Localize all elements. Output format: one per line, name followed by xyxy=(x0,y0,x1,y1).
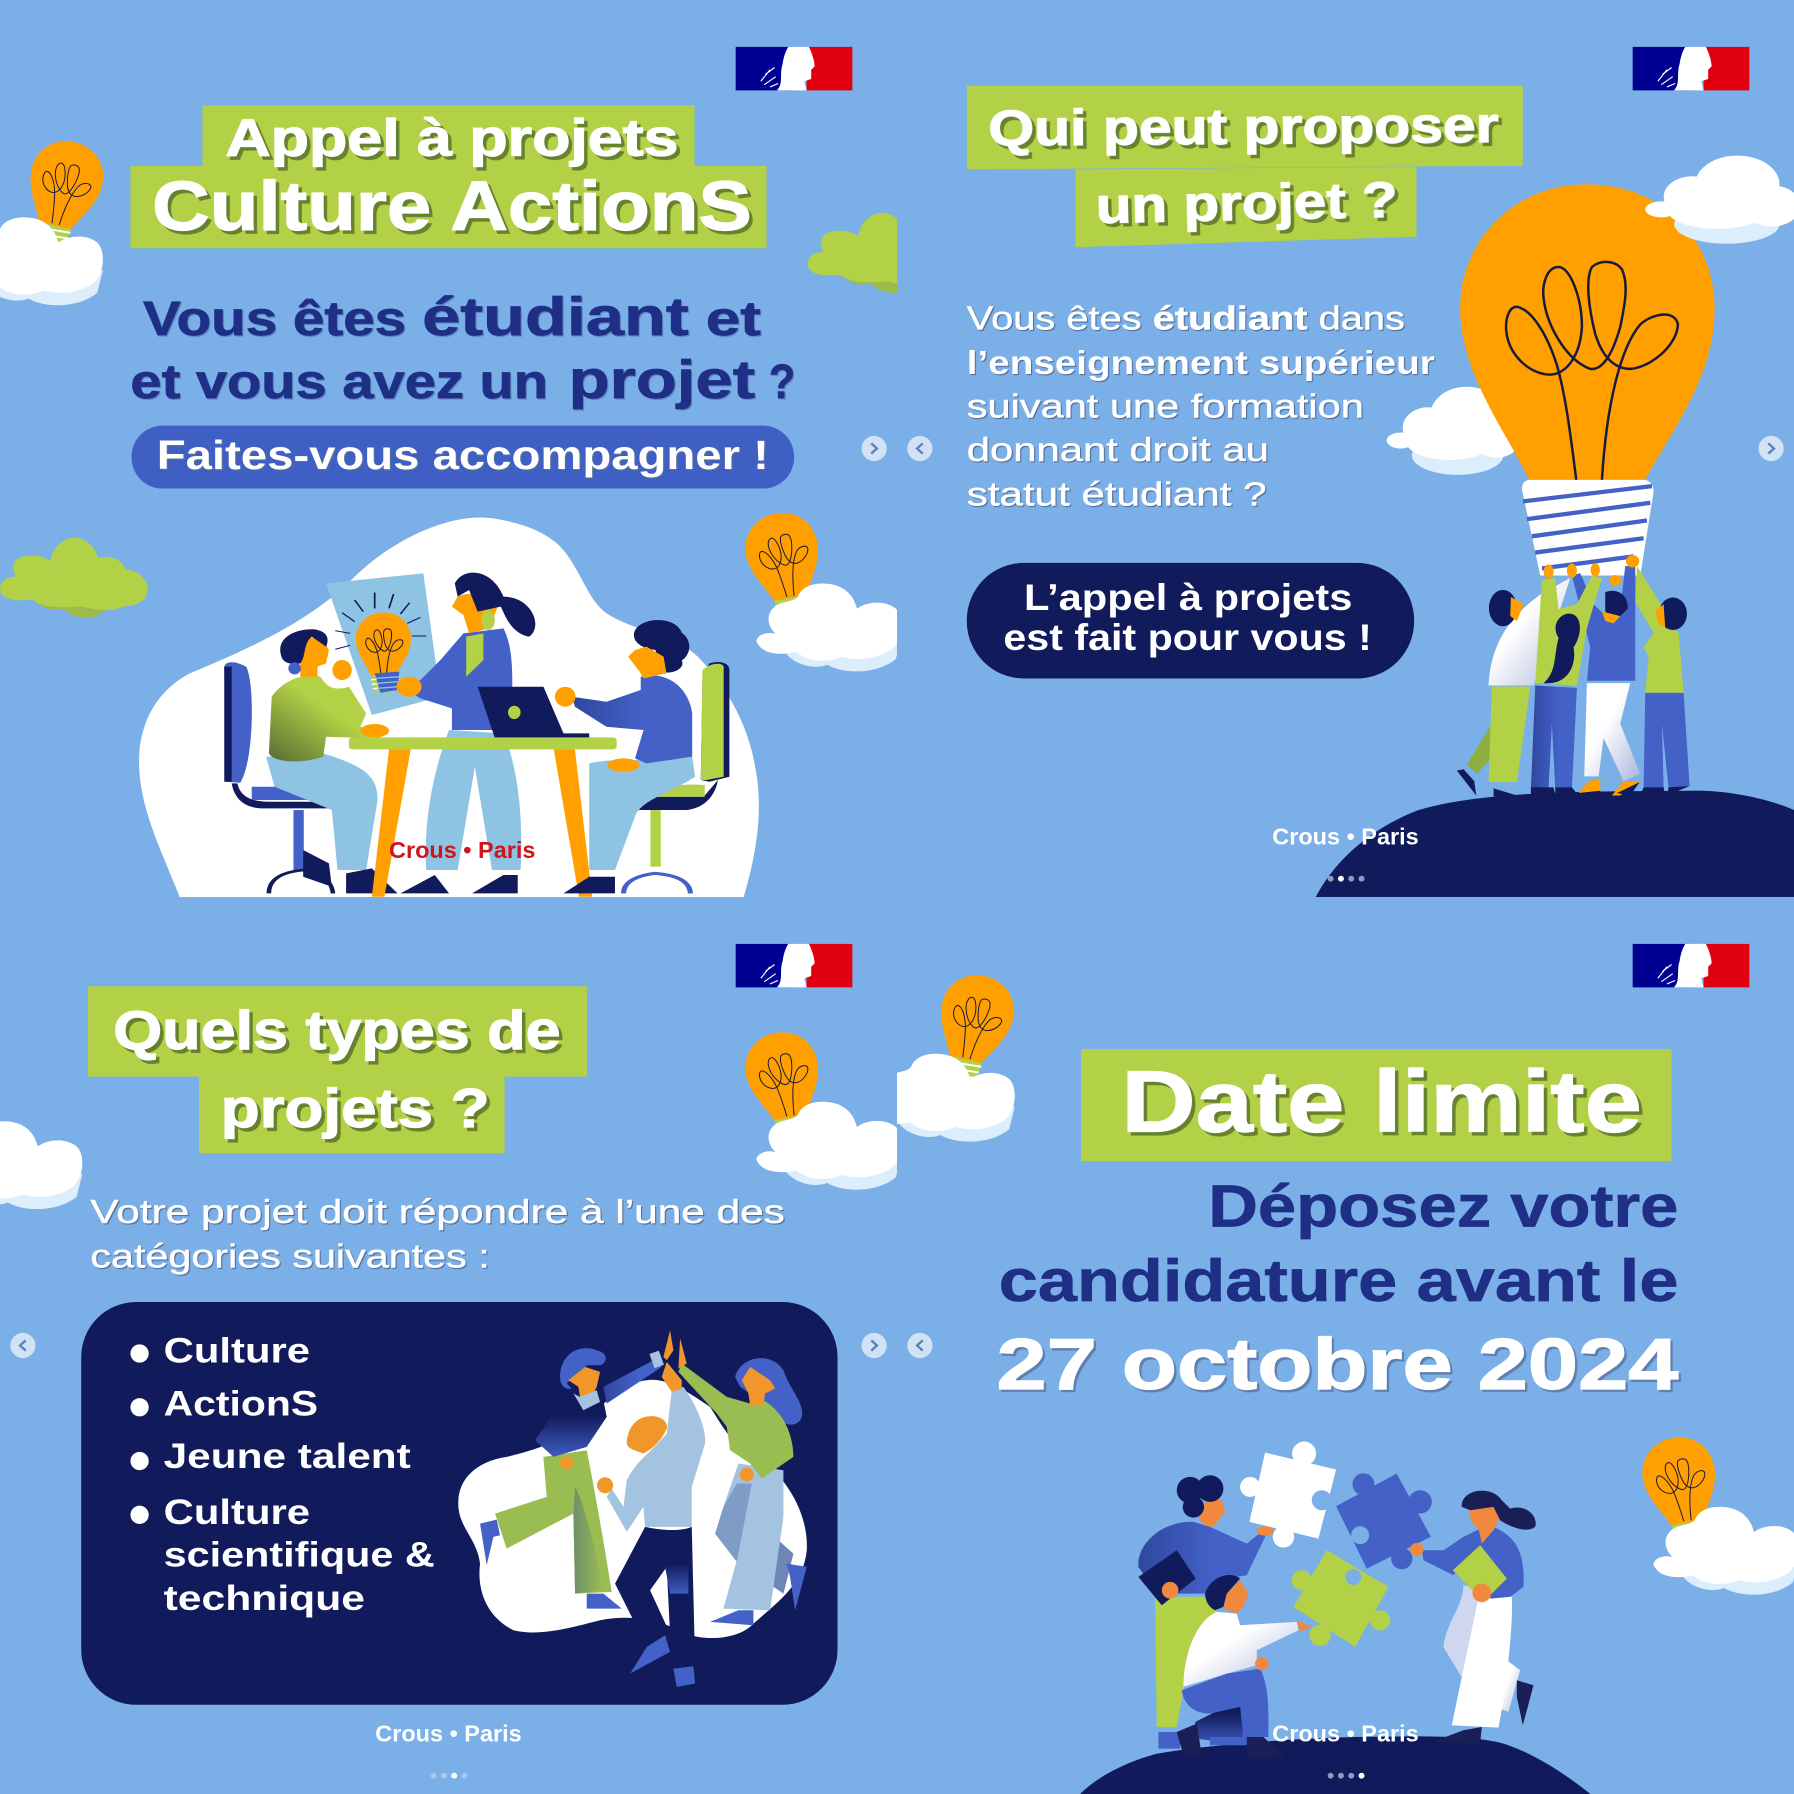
panel: Date limite xyxy=(870,944,1794,1794)
heading: Appel à projets Culture ActionS: Culture ActionS xyxy=(152,167,752,245)
text: Vous êtes étudiant et vous avez un projet: ? xyxy=(769,356,795,409)
heading: Qui peut proposer un projet: un projet ? xyxy=(1095,171,1398,234)
text: eligibility: Vous êtes étudiant dans xyxy=(967,301,1405,338)
laptop xyxy=(478,687,589,738)
text: Vous êtes étudiant et vous avez un projet: projet xyxy=(569,350,755,410)
icon: bulb top left xyxy=(14,134,111,257)
person right xyxy=(589,757,695,870)
list of categories: scientifique & xyxy=(164,1534,435,1574)
logo: République française xyxy=(736,944,852,987)
logo: Crous Paris: Crous • Paris xyxy=(1272,1720,1419,1746)
person standing xyxy=(1155,1597,1217,1727)
man center xyxy=(615,1527,695,1669)
logo: République française xyxy=(1633,944,1749,987)
illustration: team assembling puzzle xyxy=(1138,1442,1536,1758)
illustration: high five xyxy=(458,1330,807,1687)
icon: arrow previous xyxy=(907,436,932,461)
icon: cloud top left xyxy=(870,1054,1015,1142)
list of categories: Culture xyxy=(164,1492,310,1532)
icon: bulb top left xyxy=(925,968,1021,1091)
chair right xyxy=(701,662,729,782)
icon: green cloud left xyxy=(0,538,148,618)
icon: arrow next xyxy=(862,1333,887,1358)
icon: bulb bottom right xyxy=(1637,1432,1727,1551)
callout: L'appel à projets est fait pour vous xyxy=(967,563,1414,678)
text: eligibility xyxy=(967,301,1435,514)
panel: Appel à projets xyxy=(0,47,955,897)
icon: bulb right xyxy=(740,507,830,627)
icon: cloud right xyxy=(756,584,902,671)
text: Déposez votre candidature avant le: Déposez votre xyxy=(1208,1173,1678,1240)
green puzzle piece xyxy=(1292,1550,1390,1647)
text: eligibility: l’enseignement supérieur xyxy=(967,345,1435,382)
person 4 xyxy=(1644,693,1690,788)
pagination dots xyxy=(1328,876,1364,882)
heading: Date limite: Date limite xyxy=(1121,1054,1642,1151)
text: Vous êtes étudiant et vous avez un projet: étudiant xyxy=(422,287,689,347)
text: intro xyxy=(90,1194,785,1276)
logo: Crous Paris red: Crous • Paris xyxy=(389,837,535,863)
white puzzle piece xyxy=(1240,1442,1336,1548)
text: eligibility: donnant droit au xyxy=(967,432,1269,469)
icon: arrow next xyxy=(1759,436,1784,461)
table xyxy=(349,737,617,749)
illustration: team around a table xyxy=(139,517,759,897)
icon: cloud right xyxy=(756,1102,902,1190)
icon: cloud top left xyxy=(0,217,103,305)
heading: Appel à projets Culture ActionS xyxy=(130,105,767,248)
text: eligibility: suivant une formation xyxy=(967,389,1364,426)
person left xyxy=(266,753,378,870)
logo: Crous Paris: Crous • Paris xyxy=(1272,823,1419,849)
hands and feet xyxy=(1544,565,1554,579)
icon: cloud behind bulb xyxy=(1387,387,1522,475)
heading: Date limite xyxy=(1081,1049,1672,1161)
list of categories: Culture xyxy=(164,1331,310,1371)
icon: bulb right xyxy=(740,1027,830,1146)
person center xyxy=(426,730,521,870)
callout: Faites-vous accompagner xyxy=(132,426,794,489)
person crouching xyxy=(1195,1699,1243,1745)
person right xyxy=(1500,1660,1520,1712)
icon: arrow previous xyxy=(907,1333,932,1358)
icon: cloud top right xyxy=(1645,156,1794,244)
heading: Quels types de projets xyxy=(88,986,587,1153)
person 3 xyxy=(1584,683,1640,781)
heading: Quels types de projets: projets ? xyxy=(221,1077,490,1139)
heading: Appel à projets Culture ActionS: Appel à projets xyxy=(225,109,678,167)
person left xyxy=(480,1520,622,1609)
icon: cloud left xyxy=(0,1121,82,1209)
icon: green cloud right xyxy=(808,213,955,293)
callout: L'appel à projets est fait pour vous: L’appel à projets xyxy=(1024,577,1352,618)
callout: L'appel à projets est fait pour vous: est fait pour vous ! xyxy=(1003,617,1372,658)
person 2 xyxy=(1531,686,1577,788)
hill xyxy=(1080,1736,1590,1794)
poster xyxy=(326,573,440,715)
logo: République française xyxy=(1633,47,1749,90)
text: intro: Votre projet doit répondre à l’une des xyxy=(90,1194,785,1231)
logo: Crous Paris: Crous • Paris xyxy=(375,1720,522,1746)
panel: Qui peut proposer un projet xyxy=(907,47,1794,897)
text: Vous êtes étudiant et vous avez un projet: Vous êtes xyxy=(143,293,406,346)
panel: categories xyxy=(81,1302,838,1705)
heading: Qui peut proposer un projet xyxy=(967,86,1523,247)
panel: Quels types de projets xyxy=(0,944,902,1779)
text: intro: catégories suivantes : xyxy=(90,1239,490,1276)
text: Vous êtes étudiant et vous avez un projet xyxy=(130,287,795,410)
text: Vous êtes étudiant et vous avez un projet: et vous avez un xyxy=(130,356,548,409)
icon: cloud bottom right xyxy=(1653,1507,1794,1595)
text: Vous êtes étudiant et vous avez un projet: et xyxy=(706,293,761,346)
woman right xyxy=(773,1540,793,1594)
text: Déposez votre candidature avant le: candidature avant le xyxy=(999,1247,1678,1314)
pagination dots xyxy=(1328,1773,1364,1779)
list of categories xyxy=(130,1331,435,1618)
text: Déposez votre candidature avant le xyxy=(999,1173,1678,1314)
logo: République française xyxy=(736,47,852,90)
icon: arrow previous xyxy=(10,1333,35,1358)
illustration: giant bulb held by people xyxy=(1457,184,1715,796)
hill xyxy=(1316,791,1794,897)
callout: Faites-vous accompagner: Faites-vous accompagner ! xyxy=(157,432,769,478)
icon: arrow next xyxy=(862,436,887,461)
person 1 xyxy=(1467,726,1492,774)
list of categories: Jeune talent xyxy=(164,1436,411,1476)
list of categories: technique xyxy=(164,1578,365,1618)
text: eligibility: statut étudiant ? xyxy=(967,477,1267,514)
list of categories: ActionS xyxy=(164,1383,318,1423)
heading: Quels types de projets: Quels types de xyxy=(113,999,561,1061)
blue puzzle piece xyxy=(1336,1473,1432,1569)
pagination dots xyxy=(431,1773,467,1779)
text: deadline date: 27 octobre 2024 xyxy=(997,1325,1678,1405)
chair left xyxy=(224,662,252,783)
heading: Qui peut proposer un projet: Qui peut proposer xyxy=(988,96,1499,156)
